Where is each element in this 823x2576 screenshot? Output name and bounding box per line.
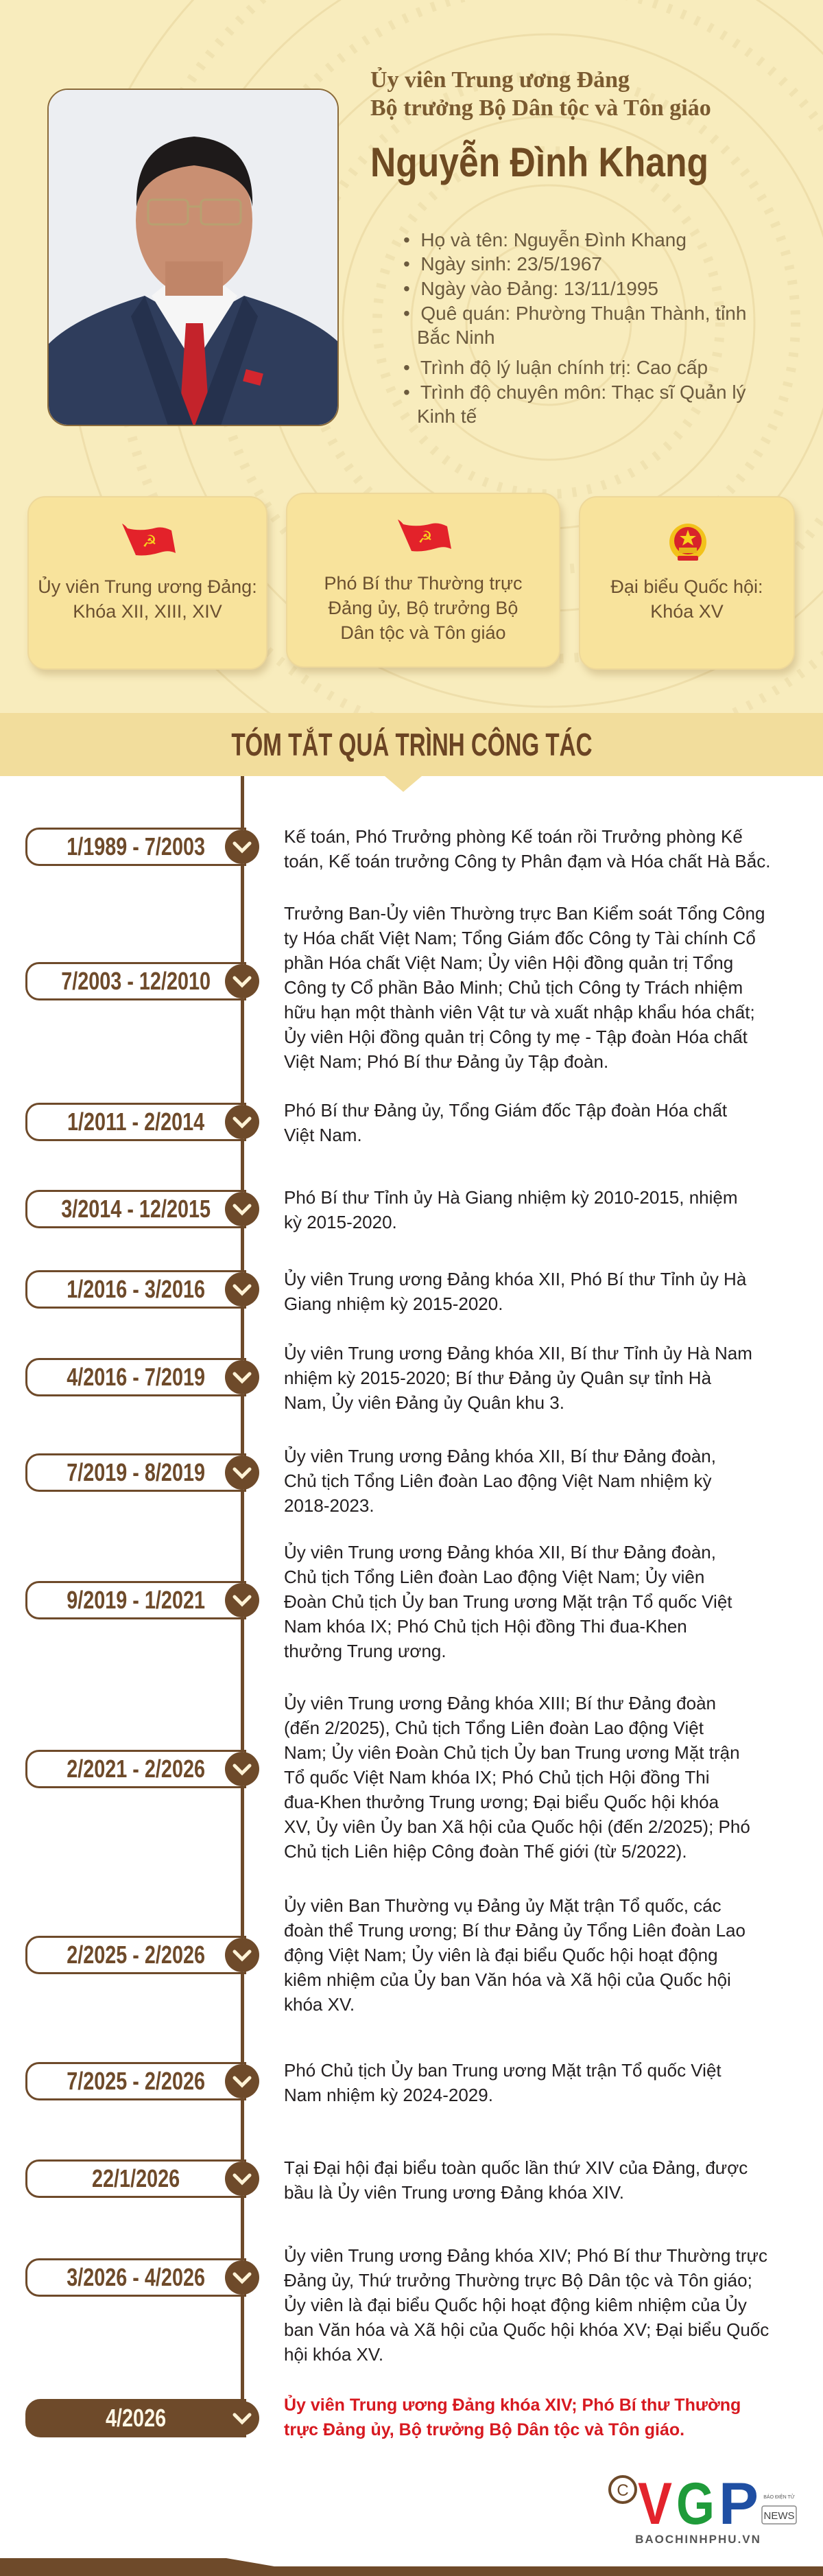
entry 11 <box>25 2062 259 2100</box>
text 9: (đến 2/2025), Chủ tịch Tổng Liên đoàn Lao động Việt <box>284 1718 704 1738</box>
entry 12: 22/1/2026 <box>92 2164 180 2192</box>
entry 1 <box>25 828 259 866</box>
text 3 <box>284 1100 727 1145</box>
text 8: Chủ tịch Tổng Liên đoàn Lao động Việt Nam; Ủy viên <box>284 1567 704 1587</box>
bio bullet list <box>403 229 746 427</box>
text 1: Kế toán, Phó Trưởng phòng Kế toán rồi Trưởng phòng Kế <box>284 826 743 847</box>
entry 14 (current): 4/2026 <box>106 2404 166 2432</box>
text 12: Tại Đại hội đại biểu toàn quốc lần thứ XIV của Đảng, được <box>284 2157 748 2178</box>
entry 13 <box>25 2258 259 2297</box>
text 14 highlighted: Ủy viên Trung ương Đảng khóa XIV; Phó Bí thư Thường <box>284 2396 741 2415</box>
text 5: Giang nhiệm kỳ 2015-2020. <box>284 1293 503 1314</box>
logo: VGP <box>608 2474 797 2546</box>
text 12: bầu là Ủy viên Trung ương Đảng khóa XIV. <box>284 2182 624 2203</box>
text 5 <box>284 1269 746 1314</box>
bio bullet list: • Trình độ chuyên môn: Thạc sĩ Quản lý <box>403 382 746 403</box>
card: national assembly <box>579 496 795 670</box>
text 2: Công ty Cổ phần Bảo Minh; Chủ tịch Công ty Trách nhiệm <box>284 977 743 998</box>
text 9: Ủy viên Trung ương Đảng khóa XIII; Bí thư Đảng đoàn <box>284 1693 716 1713</box>
text 13: ban Văn hóa và Xã hội của Quốc hội khóa XV; Đại biểu Quốc <box>284 2319 769 2340</box>
text 11: Nam nhiệm kỳ 2024-2029. <box>284 2085 493 2105</box>
top background panel <box>0 0 823 714</box>
card: deputy secretary <box>286 493 560 668</box>
text 3: Phó Bí thư Đảng ủy, Tổng Giám đốc Tập đoàn Hóa chất <box>284 1100 727 1121</box>
text 10: động Việt Nam; Ủy viên là đại biểu Quốc hội hoạt động <box>284 1945 718 1965</box>
text 7: 2018-2023. <box>284 1495 374 1516</box>
text 6: Nam, Ủy viên Đảng ủy Quân khu 3. <box>284 1392 564 1413</box>
section banner heading <box>0 713 823 776</box>
text 11 <box>284 2060 721 2105</box>
entry 6 <box>25 1358 259 1396</box>
text 6: nhiệm kỳ 2015-2020; Bí thư Đảng ủy Quân sự tỉnh Hà <box>284 1368 711 1388</box>
bio bullet list: • Họ và tên: Nguyễn Đình Khang <box>403 229 687 250</box>
text 9 <box>284 1693 750 1862</box>
text 9: Nam; Ủy viên Đoàn Chủ tịch Ủy ban Trung ương Mặt trận <box>284 1742 740 1763</box>
logo: VGP: BÁO ĐIỆN TỬ <box>763 2494 795 2500</box>
text 2: Trưởng Ban-Ủy viên Thường trực Ban Kiểm soát Tổng Công <box>284 903 765 924</box>
timeline <box>25 826 770 2439</box>
entry 9 <box>25 1750 259 1788</box>
title: position: Ủy viên Trung ương Đảng <box>370 67 630 93</box>
icon: party flag <box>398 519 451 552</box>
text 2: hữu hạn một thành viên Vật tư và xuất nhập khẩu hóa chất; <box>284 1002 755 1022</box>
entry 1: 1/1989 - 7/2003 <box>67 832 205 860</box>
entry 14 (current) <box>25 2399 259 2437</box>
text 9: đua-Khen thưởng Trung ương; Đại biểu Quốc hội khóa <box>284 1792 719 1812</box>
text 9: Tổ quốc Việt Nam khóa IX; Phó Chủ tịch Hội đồng Thi <box>284 1767 709 1788</box>
text 4 <box>284 1187 738 1232</box>
text 4: kỳ 2015-2020. <box>284 1212 397 1232</box>
bottom brown band <box>0 2558 823 2576</box>
entry 9: 2/2021 - 2/2026 <box>67 1755 205 1783</box>
card: deputy secretary: Phó Bí thư Thường trực <box>324 573 523 594</box>
text 1: toán, Kế toán trưởng Công ty Phân đạm và Hóa chất Hà Bắc. <box>284 851 770 871</box>
bio bullet list: • Ngày vào Đảng: 13/11/1995 <box>403 278 658 299</box>
timeline vertical line <box>241 776 244 2423</box>
card: party central committee: Ủy viên Trung ương Đảng: <box>38 576 257 597</box>
bio bullet list: Kinh tế <box>417 406 477 427</box>
text 14 highlighted <box>284 2395 741 2439</box>
entry 3 <box>25 1103 259 1141</box>
text 8 <box>284 1542 732 1661</box>
text 8: thưởng Trung ương. <box>284 1641 446 1661</box>
title: name: Nguyễn Đình Khang <box>370 139 708 185</box>
entry 13: 3/2026 - 4/2026 <box>67 2263 205 2291</box>
text 13 <box>284 2245 769 2365</box>
entry 7: 7/2019 - 8/2019 <box>67 1458 205 1486</box>
entry 12 <box>25 2159 259 2198</box>
icon: national emblem <box>669 524 706 561</box>
text 10: kiêm nhiệm của Ủy ban Văn hóa và Xã hội của Quốc hội <box>284 1969 731 1990</box>
entry 5: 1/2016 - 3/2016 <box>67 1275 205 1303</box>
bio bullet list: • Trình độ lý luận chính trị: Cao cấp <box>403 357 708 378</box>
logo: VGP: BAOCHINHPHU.VN <box>635 2533 761 2546</box>
text 10: Ủy viên Ban Thường vụ Đảng ủy Mặt trận Tổ quốc, các <box>284 1895 721 1916</box>
entry 8 <box>25 1581 259 1619</box>
text 6: Ủy viên Trung ương Đảng khóa XII, Bí thư Tỉnh ủy Hà Nam <box>284 1343 752 1363</box>
text 14 highlighted: trực Đảng ủy, Bộ trưởng Bộ Dân tộc và Tôn giáo. <box>284 2420 684 2439</box>
text 4: Phó Bí thư Tỉnh ủy Hà Giang nhiệm kỳ 2010-2015, nhiệm <box>284 1187 738 1208</box>
text 9: Chủ tịch Liên hiệp Công đoàn Thế giới (từ 5/2022). <box>284 1841 687 1862</box>
text 12 <box>284 2157 748 2203</box>
card: party central committee: Khóa XII, XIII, XIV <box>73 601 222 622</box>
text 2: ty Hóa chất Việt Nam; Tổng Giám đốc Công ty Tài chính Cổ <box>284 928 756 948</box>
text 13: Ủy viên Trung ương Đảng khóa XIV; Phó Bí thư Thường trực <box>284 2245 767 2266</box>
banner pointer <box>385 776 422 792</box>
text 1 <box>284 826 770 871</box>
text 2: phần Hóa chất Việt Nam; Ủy viên Hội đồng quản trị Tổng <box>284 952 733 973</box>
entry 2: 7/2003 - 12/2010 <box>61 967 211 995</box>
text 9: XV, Ủy viên Ủy ban Xã hội của Quốc hội (đến 2/2025); Phó <box>284 1816 750 1837</box>
entry 4 <box>25 1190 259 1228</box>
title: position <box>370 67 711 121</box>
bio bullet list: • Quê quán: Phường Thuận Thành, tỉnh <box>403 303 746 324</box>
card: deputy secretary: Dân tộc và Tôn giáo <box>340 622 506 643</box>
text 6 <box>284 1343 752 1413</box>
text 5: Ủy viên Trung ương Đảng khóa XII, Phó Bí thư Tỉnh ủy Hà <box>284 1269 746 1289</box>
text 11: Phó Chủ tịch Ủy ban Trung ương Mặt trận Tổ quốc Việt <box>284 2060 721 2081</box>
text 2: Ủy viên Hội đồng quản trị Công ty mẹ - Tập đoàn Hóa chất <box>284 1027 748 1047</box>
entry 10: 2/2025 - 2/2026 <box>67 1941 205 1969</box>
text 8: Đoàn Chủ tịch Ủy ban Trung ương Mặt trận Tổ quốc Việt <box>284 1591 732 1612</box>
section banner heading: TÓM TẮT QUÁ TRÌNH CÔNG TÁC <box>231 727 592 762</box>
entry 2 <box>25 962 259 1000</box>
text 13: hội khóa XV. <box>284 2344 383 2365</box>
entry 3: 1/2011 - 2/2014 <box>67 1108 204 1136</box>
text 2: Việt Nam; Phó Bí thư Đảng ủy Tập đoàn. <box>284 1051 608 1072</box>
card: national assembly: Khóa XV <box>650 601 724 622</box>
logo: VGP: C <box>617 2481 629 2500</box>
text 7: Ủy viên Trung ương Đảng khóa XII, Bí thư Đảng đoàn, <box>284 1446 716 1466</box>
icon: party flag: ☭ <box>142 532 157 551</box>
text 10: đoàn thể Trung ương; Bí thư Đảng ủy Tổng Liên đoàn Lao <box>284 1920 746 1941</box>
entry 5 <box>25 1270 259 1309</box>
text 7 <box>284 1446 716 1516</box>
bio bullet list: • Ngày sinh: 23/5/1967 <box>403 253 602 274</box>
entry 11: 7/2025 - 2/2026 <box>67 2067 205 2095</box>
entry 7 <box>25 1453 259 1492</box>
text 10: khóa XV. <box>284 1994 355 2015</box>
entry 4: 3/2014 - 12/2015 <box>61 1195 211 1223</box>
text 8: Nam khóa IX; Phó Chủ tịch Hội đồng Thi đua-Khen <box>284 1616 687 1637</box>
text 10 <box>284 1895 746 2015</box>
icon: party flag <box>122 524 176 556</box>
title: position: Bộ trưởng Bộ Dân tộc và Tôn giáo <box>370 95 711 121</box>
entry 6: 4/2016 - 7/2019 <box>67 1363 205 1391</box>
card: deputy secretary: Đảng ủy, Bộ trưởng Bộ <box>329 598 518 618</box>
card: national assembly: Đại biểu Quốc hội: <box>610 576 763 597</box>
portrait photo <box>47 89 339 426</box>
entry 10 <box>25 1936 259 1974</box>
text 2 <box>284 903 765 1072</box>
text 8: Ủy viên Trung ương Đảng khóa XII, Bí thư Đảng đoàn, <box>284 1542 716 1562</box>
text 7: Chủ tịch Tổng Liên đoàn Lao động Việt Nam nhiệm kỳ <box>284 1471 711 1491</box>
logo: VGP: NEWS <box>764 2510 794 2522</box>
text 13: Ủy viên là đại biểu Quốc hội hoạt động kiêm nhiệm của Ủy <box>284 2295 747 2315</box>
card: party central committee <box>27 496 267 670</box>
bio bullet list: Bắc Ninh <box>417 327 495 348</box>
text 13: Đảng ủy, Thứ trưởng Thường trực Bộ Dân tộc và Tôn giáo; <box>284 2270 752 2291</box>
icon: party flag: ☭ <box>418 528 433 547</box>
entry 8: 9/2019 - 1/2021 <box>67 1586 205 1614</box>
text 3: Việt Nam. <box>284 1125 362 1145</box>
